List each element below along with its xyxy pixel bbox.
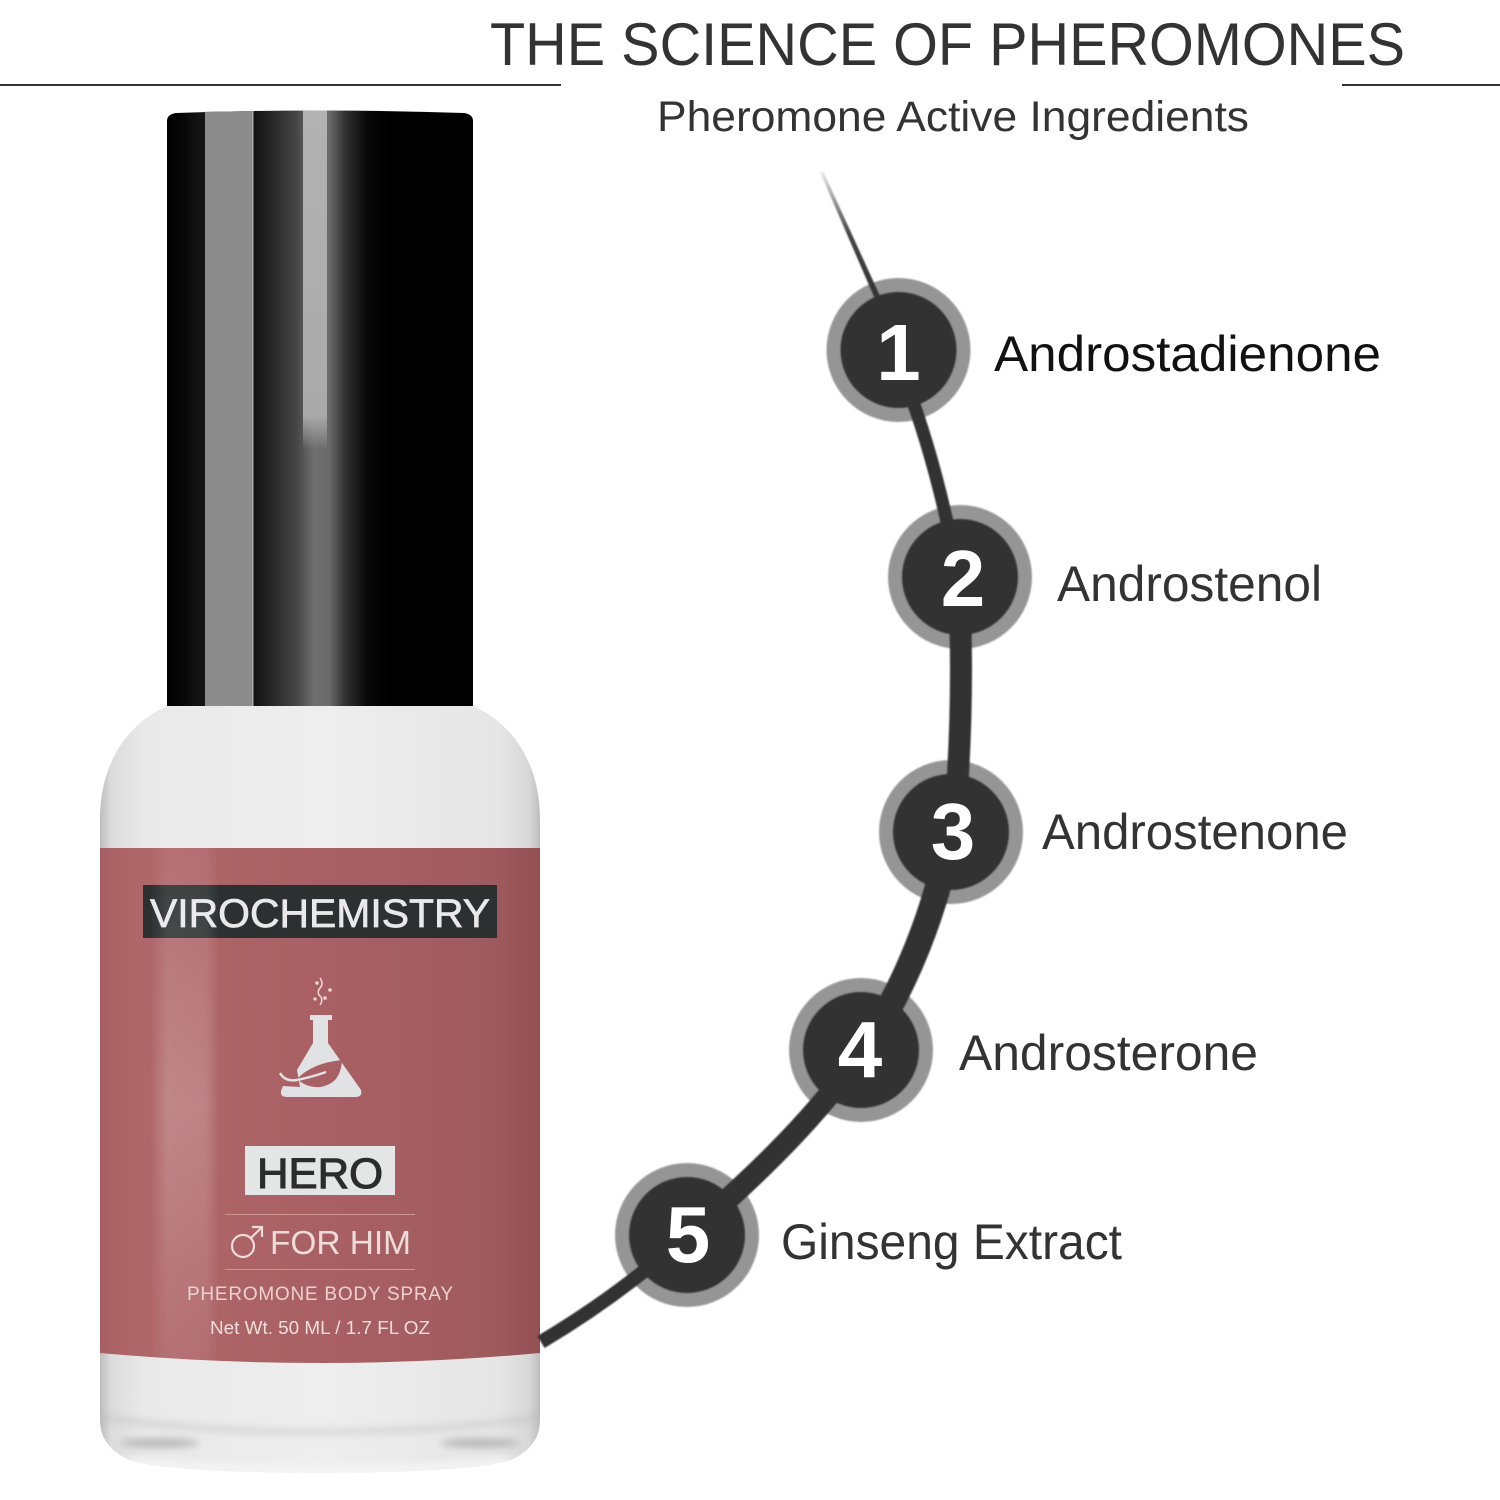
- for him line: FOR HIM: [270, 1224, 411, 1261]
- step 1: [840, 292, 956, 408]
- icon: flask with leaf: [280, 978, 361, 1097]
- label: Androstenone: Androstenone: [1042, 804, 1348, 860]
- step 2: [902, 519, 1018, 635]
- step 5: [629, 1177, 745, 1293]
- step 1: 1: [876, 308, 921, 397]
- divider lower: [225, 1269, 415, 1270]
- bottle cap: [167, 105, 473, 706]
- step 3: 3: [931, 787, 975, 876]
- step 4: 4: [838, 1005, 883, 1094]
- subtitle: Pheromone Active Ingredients: [657, 93, 1249, 141]
- net weight: Net Wt. 50 ML / 1.7 FL OZ: [210, 1317, 430, 1338]
- curved connector line: [541, 171, 961, 1342]
- header rule left: [0, 84, 561, 86]
- divider upper: [225, 1214, 415, 1215]
- header rule right: [1342, 84, 1500, 86]
- bottle body: [100, 700, 540, 1480]
- outer rings of steps: [615, 278, 1032, 1307]
- label: Androsterone: Androsterone: [959, 1025, 1258, 1081]
- step 3: [893, 774, 1009, 890]
- step 4: [803, 992, 919, 1108]
- product type: PHEROMONE BODY SPRAY: [187, 1284, 453, 1305]
- pink label: [100, 848, 540, 1363]
- label: Androstadienone: Androstadienone: [994, 326, 1381, 382]
- step 2: 2: [941, 534, 985, 623]
- label: Androstenol: Androstenol: [1057, 556, 1322, 612]
- title: THE SCIENCE OF PHEROMONES: [490, 11, 1405, 78]
- brand banner: VIROCHEMISTRY: [150, 892, 490, 936]
- product bottle: [100, 105, 540, 1480]
- product name badge: HERO: [257, 1150, 383, 1198]
- label: Ginseng Extract: Ginseng Extract: [781, 1214, 1122, 1270]
- step 5: 5: [666, 1190, 710, 1279]
